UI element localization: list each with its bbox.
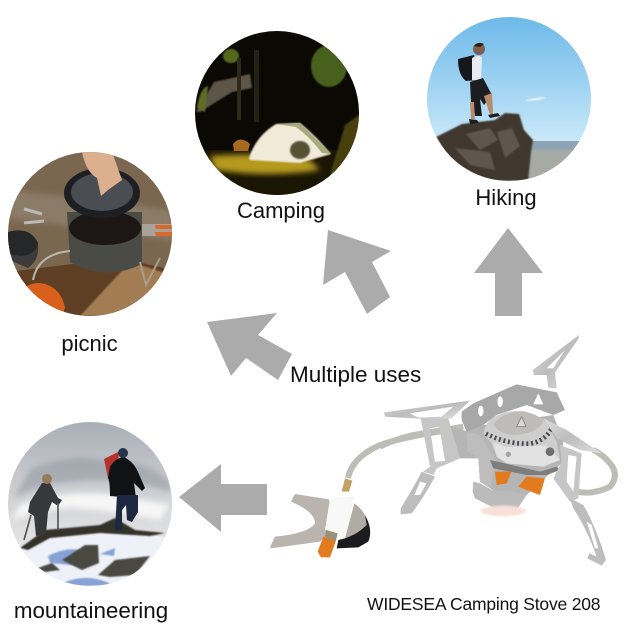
right support arm bbox=[543, 418, 602, 453]
stove frame backing bbox=[448, 415, 563, 495]
regulator disc bbox=[345, 503, 367, 540]
windshield bbox=[462, 384, 565, 433]
base plate bbox=[490, 460, 560, 475]
left foot bbox=[401, 472, 435, 514]
label: mountaineering: mountaineering bbox=[14, 598, 168, 623]
burner hose bbox=[380, 427, 615, 493]
product: camping stove bbox=[380, 335, 615, 566]
photo: picnic cookware bbox=[8, 152, 172, 316]
white tag bbox=[325, 496, 354, 538]
left support arm bbox=[384, 401, 470, 419]
windshield vents bbox=[478, 393, 543, 416]
photo: camping tent at night bbox=[195, 31, 359, 195]
right support strut bbox=[553, 445, 582, 502]
burner cap bbox=[493, 412, 543, 435]
arrow: to Camping bbox=[323, 230, 391, 314]
arrow: to picnic bbox=[207, 313, 292, 380]
label: product name: WIDESEA Camping Stove 208 bbox=[367, 594, 600, 614]
burner strut bbox=[467, 432, 497, 488]
brass connector bbox=[342, 478, 352, 492]
orange valve bbox=[495, 472, 545, 495]
valve stem bbox=[325, 530, 338, 542]
photo: mountaineers on snowy summit bbox=[8, 422, 172, 586]
rear support bbox=[533, 335, 579, 388]
burner perforations bbox=[486, 425, 553, 444]
reflection bbox=[481, 506, 526, 516]
orange knob bbox=[318, 537, 336, 557]
label: Hiking: Hiking bbox=[475, 185, 537, 210]
arrow: to mountaineering bbox=[179, 464, 267, 532]
burner lower body bbox=[493, 442, 560, 467]
right foot bbox=[570, 498, 606, 566]
label: picnic: picnic bbox=[61, 331, 118, 356]
base block bbox=[473, 482, 527, 510]
gas hose to regulator bbox=[348, 428, 462, 478]
heat shield plate bbox=[270, 494, 333, 548]
product: gas regulator with heat plate bbox=[270, 478, 370, 557]
label: Multiple uses: Multiple uses bbox=[290, 362, 421, 387]
photo: hiker on rock bbox=[427, 17, 592, 183]
burner head bbox=[483, 411, 560, 467]
arrow: to Hiking bbox=[474, 228, 543, 316]
left support strut bbox=[421, 418, 460, 475]
burner logo bbox=[517, 417, 526, 427]
label: Camping: Camping bbox=[237, 198, 325, 223]
